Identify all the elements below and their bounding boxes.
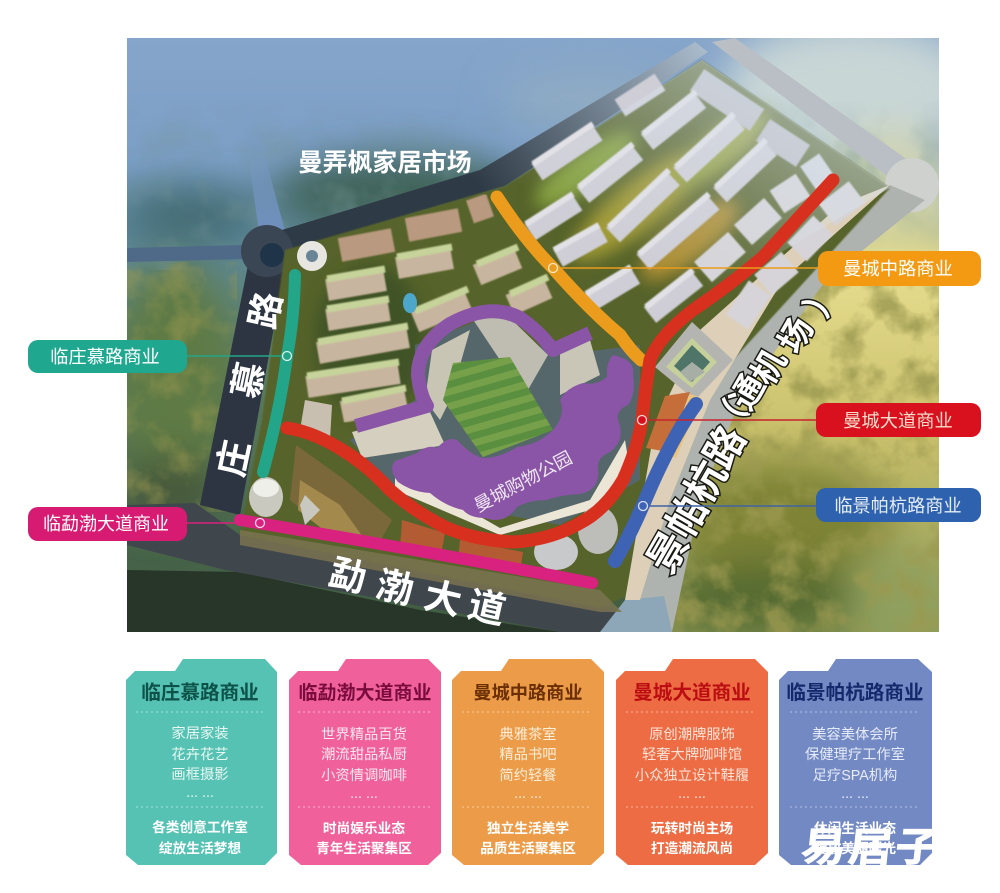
card list: 简约轻餐 <box>499 767 557 784</box>
development site ground <box>240 60 890 608</box>
zone: 临勐渤大道 pink road <box>240 520 592 583</box>
card list: 足疗SPA机构 <box>813 767 897 784</box>
road label: 景帕杭路通机场: 机 <box>745 343 794 392</box>
map background: sky haze and forest <box>127 38 939 632</box>
south frontage <box>240 530 622 612</box>
panel: 曼城大道商业 <box>616 659 768 865</box>
road label: 景帕杭路通机场: 路 <box>697 419 755 476</box>
card list: 原创潮牌服饰 <box>649 726 735 743</box>
card list <box>805 726 905 802</box>
callout: 临庄慕路商业 <box>28 340 292 373</box>
card list: 美容美体会所 <box>812 726 898 743</box>
road label: 庄慕路: 慕 <box>225 359 273 402</box>
landscaped gardens <box>315 99 778 415</box>
card list: ... ... <box>841 786 869 802</box>
callout: 临景帕杭路商业 <box>638 488 981 522</box>
card slogan: 各类创意工作室 <box>152 819 248 835</box>
card list: ... ... <box>514 786 542 802</box>
zone: 临景帕杭路 blue road <box>615 404 696 561</box>
card list: 保健理疗工作室 <box>805 746 905 763</box>
east commercial strip <box>625 185 890 600</box>
card list: ... ... <box>678 786 706 802</box>
road label: 景帕杭路通机场: （ <box>707 394 756 443</box>
panel: 临景帕杭路商业 <box>779 659 932 865</box>
podium buildings around the shopping park <box>350 315 640 535</box>
road label: 庄慕路 <box>216 292 284 478</box>
card slogan: 绽放生活梦想 <box>159 840 241 856</box>
callout: 曼城中路商业 <box>548 251 981 286</box>
callout: 曼城中路商业: 曼城中路商业 <box>843 258 953 279</box>
road label: 景帕杭路通机场: 杭 <box>678 454 736 511</box>
road label: 景帕杭路通机场: 通 <box>724 368 773 417</box>
callout: 曼城大道商业: 曼城大道商业 <box>843 410 953 431</box>
card list: 花卉花艺 <box>171 746 229 763</box>
card list: ... ... <box>186 785 214 801</box>
road label: 景帕杭路通机场 <box>642 298 832 578</box>
card list: 家居家装 <box>171 725 229 742</box>
card slogan <box>651 820 733 856</box>
zone: 曼城大道 red road <box>287 180 833 542</box>
residential blocks west <box>307 205 548 412</box>
card list: 精品书吧 <box>499 746 557 763</box>
card slogan: 时尚娱乐业态 <box>323 820 405 836</box>
callout: 曼城大道商业 <box>638 403 981 437</box>
road label: 勐渤大道: 渤 <box>372 564 417 612</box>
road label: 庄慕路: 庄 <box>210 437 258 480</box>
card list: ... ... <box>350 786 378 802</box>
road label: 勐渤大道: 道 <box>464 584 509 632</box>
card title: 曼城大道商业 <box>633 681 751 704</box>
road label: 景帕杭路通机场: 帕 <box>659 489 717 546</box>
road label: 曼弄枫家居市场: 曼弄枫家居市场 <box>298 149 472 177</box>
aerial map panel <box>115 20 980 645</box>
football field <box>443 357 553 457</box>
card slogan <box>814 820 896 856</box>
watermark: 易居子 <box>799 825 945 870</box>
card list: 小众独立设计鞋履 <box>635 767 749 784</box>
callout: 临景帕杭路商业: 临景帕杭路商业 <box>834 496 962 516</box>
residential towers north-east <box>526 80 857 322</box>
stadium building <box>646 322 733 458</box>
card slogan: 青年生活聚集区 <box>316 840 412 856</box>
road label: 景帕杭路通机场: ） <box>799 275 848 324</box>
card slogan: 品质生活聚集区 <box>480 840 576 856</box>
card slogan: 打造潮流风尚 <box>651 840 733 856</box>
distance haze <box>528 60 890 286</box>
zone: 曼城中路 orange road <box>497 197 641 360</box>
card slogan: 玩转时尚主场 <box>651 820 733 836</box>
zone: 临庄慕路 teal road <box>263 275 295 472</box>
card title: 曼城中路商业 <box>473 682 583 703</box>
zone: shopping park (purple) <box>356 311 634 520</box>
road label: 景帕杭路通机场: 场 <box>772 311 821 360</box>
card list: 画框摄影 <box>171 766 229 783</box>
card list <box>171 725 229 801</box>
callout: 临庄慕路商业: 临庄慕路商业 <box>50 346 160 367</box>
panel: 临庄慕路商业 <box>126 659 277 865</box>
road label: 勐渤大道: 勐 <box>325 552 370 600</box>
card list <box>635 726 749 802</box>
card list: 世界精品百货 <box>321 726 407 743</box>
panel: 临勐渤大道商业 <box>289 659 441 865</box>
road label: 勐渤大道 <box>328 556 506 626</box>
card slogan: 休闲生活业态 <box>814 820 896 836</box>
card slogan: 独立生活美学 <box>487 820 569 836</box>
callout: 临勐渤大道商业: 临勐渤大道商业 <box>43 514 169 534</box>
panel: 曼城中路商业 <box>452 659 604 865</box>
card list: 典雅茶室 <box>499 726 557 743</box>
card title: 临庄慕路商业 <box>141 681 259 704</box>
card slogan <box>480 820 576 856</box>
card title: 临勐渤大道商业 <box>298 681 432 704</box>
card list: 小资情调咖啡 <box>321 767 407 784</box>
orange roof shops <box>400 520 523 564</box>
card list <box>499 726 557 802</box>
road label: 勐渤大道: 大 <box>420 575 465 623</box>
card list: 潮流甜品私厨 <box>321 746 407 763</box>
card list: 轻奢大牌咖啡馆 <box>642 746 742 763</box>
south-west towers <box>290 400 392 545</box>
card title: 临景帕杭路商业 <box>786 681 924 704</box>
road label: 庄慕路: 路 <box>242 289 290 332</box>
roads <box>127 38 939 632</box>
pool <box>403 293 417 313</box>
round buildings <box>249 241 618 570</box>
card slogan: 绽放美丽曙光 <box>814 840 896 856</box>
card list <box>321 726 407 802</box>
card slogan <box>152 819 248 856</box>
card slogan <box>316 820 412 856</box>
callout: 临勐渤大道商业 <box>28 507 264 541</box>
road label: 景帕杭路通机场: 景 <box>640 524 698 581</box>
label: shopping park: 曼城购物公园 <box>471 448 576 516</box>
